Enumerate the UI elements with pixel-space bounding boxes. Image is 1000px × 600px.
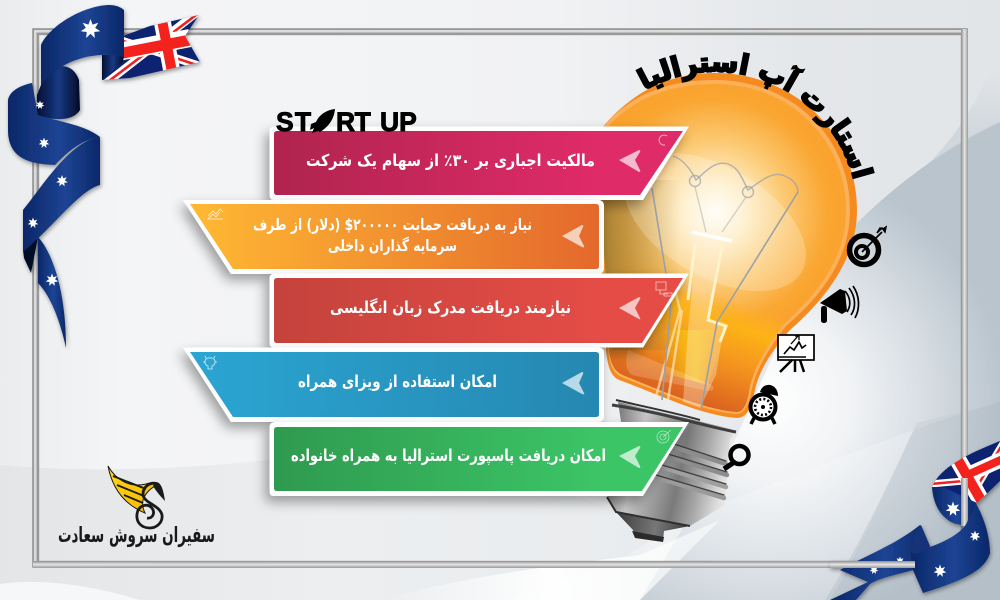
- icon: presentation board: [778, 335, 814, 372]
- bulb highlight: [626, 153, 806, 291]
- banner 2: سرمایه گذاران داخلی: [328, 236, 457, 255]
- ribbon: bottom right flag: [830, 438, 1000, 600]
- banner text: امکان دریافت پاسپورت استرالیا به همراه خانواده: [291, 446, 606, 466]
- bulb left shade: [600, 180, 672, 350]
- icon: ring: [659, 135, 667, 145]
- flag field: [100, 10, 202, 84]
- bulb lower orange: [600, 290, 790, 412]
- icon: light bulb: [203, 356, 217, 369]
- start up heading: ST: [276, 107, 312, 137]
- logo text: سفیران سروش سعادت: [58, 523, 215, 547]
- icon: magnifier: [724, 446, 748, 469]
- banner text: مالکیت اجباری بر ۳۰٪ از سهام یک شرکت: [306, 151, 595, 171]
- flag field: [930, 438, 1000, 508]
- arrow: [562, 225, 584, 247]
- banner text: نیازمند دریافت مدرک زبان انگلیسی: [330, 297, 571, 317]
- ribbon dark loop: [37, 66, 80, 119]
- bulb inner fill: [598, 80, 850, 414]
- arrow: [619, 150, 640, 172]
- ribbon lower tail: [38, 237, 66, 348]
- bulb glass: [600, 73, 857, 418]
- start up heading: UP: [380, 107, 417, 137]
- banner 5: [270, 422, 689, 496]
- filament wires: [652, 156, 798, 410]
- glass stem: [655, 228, 736, 408]
- ribbon diagonal: [23, 137, 100, 252]
- icon: computer: [656, 282, 672, 296]
- bulb centre yellow: [666, 330, 714, 385]
- icon: alarm clock: [750, 385, 778, 424]
- ribbon main fold: [910, 502, 990, 593]
- icon: small target: [657, 430, 671, 443]
- icon: line chart: [207, 209, 223, 219]
- bulb screw base: [607, 400, 736, 542]
- banner 2: [183, 200, 604, 274]
- ribbon back fold: [102, 55, 124, 80]
- banner 1: [270, 126, 689, 200]
- ribbon stars: [870, 502, 980, 577]
- ribbon: top left flag: [8, 5, 202, 348]
- icon: rocket: [310, 109, 335, 133]
- start up heading: RT: [336, 107, 371, 137]
- frame rod over ribbon: [830, 561, 915, 568]
- banner 4: [183, 348, 604, 422]
- start up heading: [276, 107, 417, 137]
- ribbon upper blue: [932, 486, 977, 525]
- arrow: [619, 297, 640, 319]
- icon: target: [850, 227, 886, 264]
- arrow: [619, 446, 640, 468]
- curved title: استارت آپ استرالیا: [635, 52, 875, 180]
- ribbon stars: [28, 19, 100, 286]
- banner text: نیاز به دریافت حمایت ۲۰۰۰۰۰$ (دلار) از طرف: [253, 215, 532, 234]
- frame rod over flag: [961, 478, 968, 526]
- light bulb: [598, 73, 857, 542]
- icon: megaphone: [820, 286, 859, 323]
- arrow: [562, 372, 584, 394]
- company logo: [58, 466, 215, 547]
- banner 3: [270, 274, 689, 348]
- logo bird: [108, 466, 165, 528]
- banner text: امکان استفاده از ویزای همراه: [298, 372, 497, 392]
- ribbon lower band: [830, 525, 930, 600]
- ribbon wide band: [8, 83, 100, 165]
- ribbon top band: [41, 5, 124, 85]
